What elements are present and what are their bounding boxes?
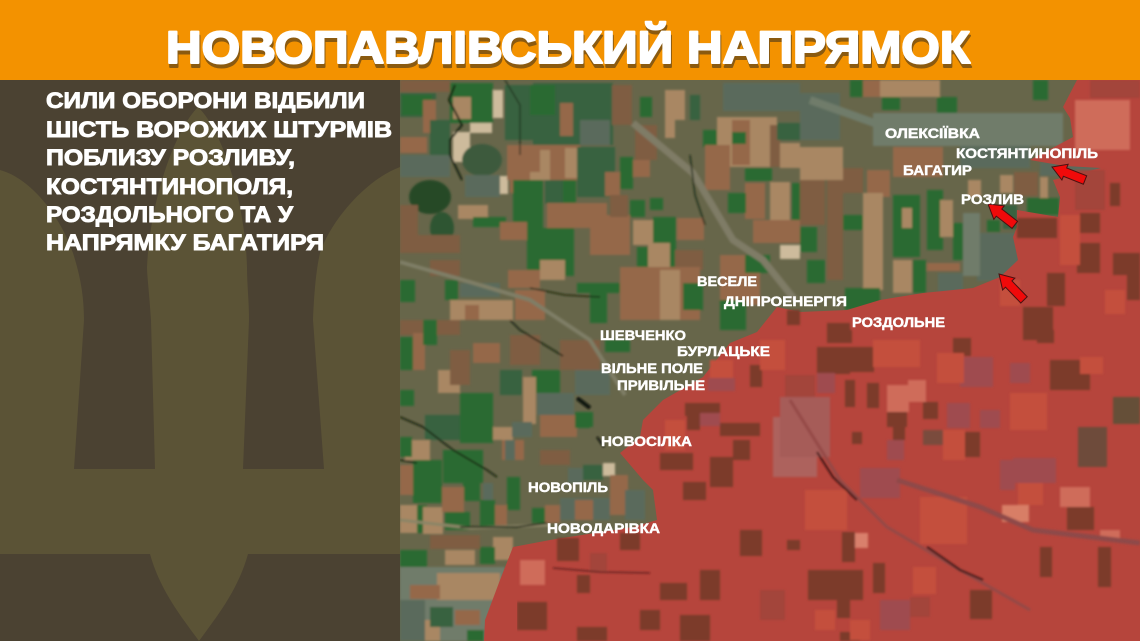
summary text: СИЛИ ОБОРОНИ ВІДБИЛИ (46, 88, 365, 113)
arrow: Rozlyv (983, 197, 1020, 232)
place labels: ДНІПРОЕНЕРГІЯ (724, 294, 847, 309)
place labels: БАГАТИР (903, 163, 972, 178)
place labels (528, 126, 1098, 536)
occupied territory overlay (484, 80, 1140, 641)
place labels: КОСТЯНТИНОПІЛЬ (956, 146, 1098, 161)
place labels: НОВОПІЛЬ (528, 480, 608, 495)
arrow: Rozdolne (993, 268, 1030, 306)
summary text: ПОБЛИЗУ РОЗЛИВУ, (46, 145, 295, 170)
place labels: НОВОДАРІВКА (547, 521, 660, 536)
place labels: ПРИВІЛЬНЕ (617, 378, 705, 393)
place labels: РОЗДОЛЬНЕ (852, 315, 945, 330)
place labels: НОВОСІЛКА (601, 434, 692, 449)
summary text: РОЗДОЛЬНОГО ТА У (46, 202, 293, 227)
left panel with trident emblem (0, 80, 400, 641)
place labels: ВЕСЕЛЕ (697, 274, 757, 289)
place labels: ВІЛЬНЕ ПОЛЕ (601, 361, 703, 376)
place labels: БУРЛАЦЬКЕ (677, 344, 770, 359)
place labels: ОЛЕКСІЇВКА (885, 126, 980, 141)
satellite map (400, 80, 1140, 641)
red area field patches (517, 80, 1140, 641)
summary text: ШІСТЬ ВОРОЖИХ ШТУРМІВ (46, 117, 392, 142)
summary text: КОСТЯНТИНОПОЛЯ, (46, 174, 293, 199)
summary text: НАПРЯМКУ БАГАТИРЯ (46, 230, 324, 255)
header bar (0, 0, 1140, 80)
arrow: Kostiantynopil (1049, 159, 1088, 188)
summary text (46, 88, 392, 255)
place labels: ШЕВЧЕНКО (600, 328, 686, 343)
title: НОВОПАВЛІВСЬКИЙ НАПРЯМОК (166, 22, 971, 73)
title: НОВОПАВЛІВСЬКИЙ НАПРЯМОК (167, 26, 972, 77)
place labels: РОЗЛИВ (961, 192, 1024, 207)
